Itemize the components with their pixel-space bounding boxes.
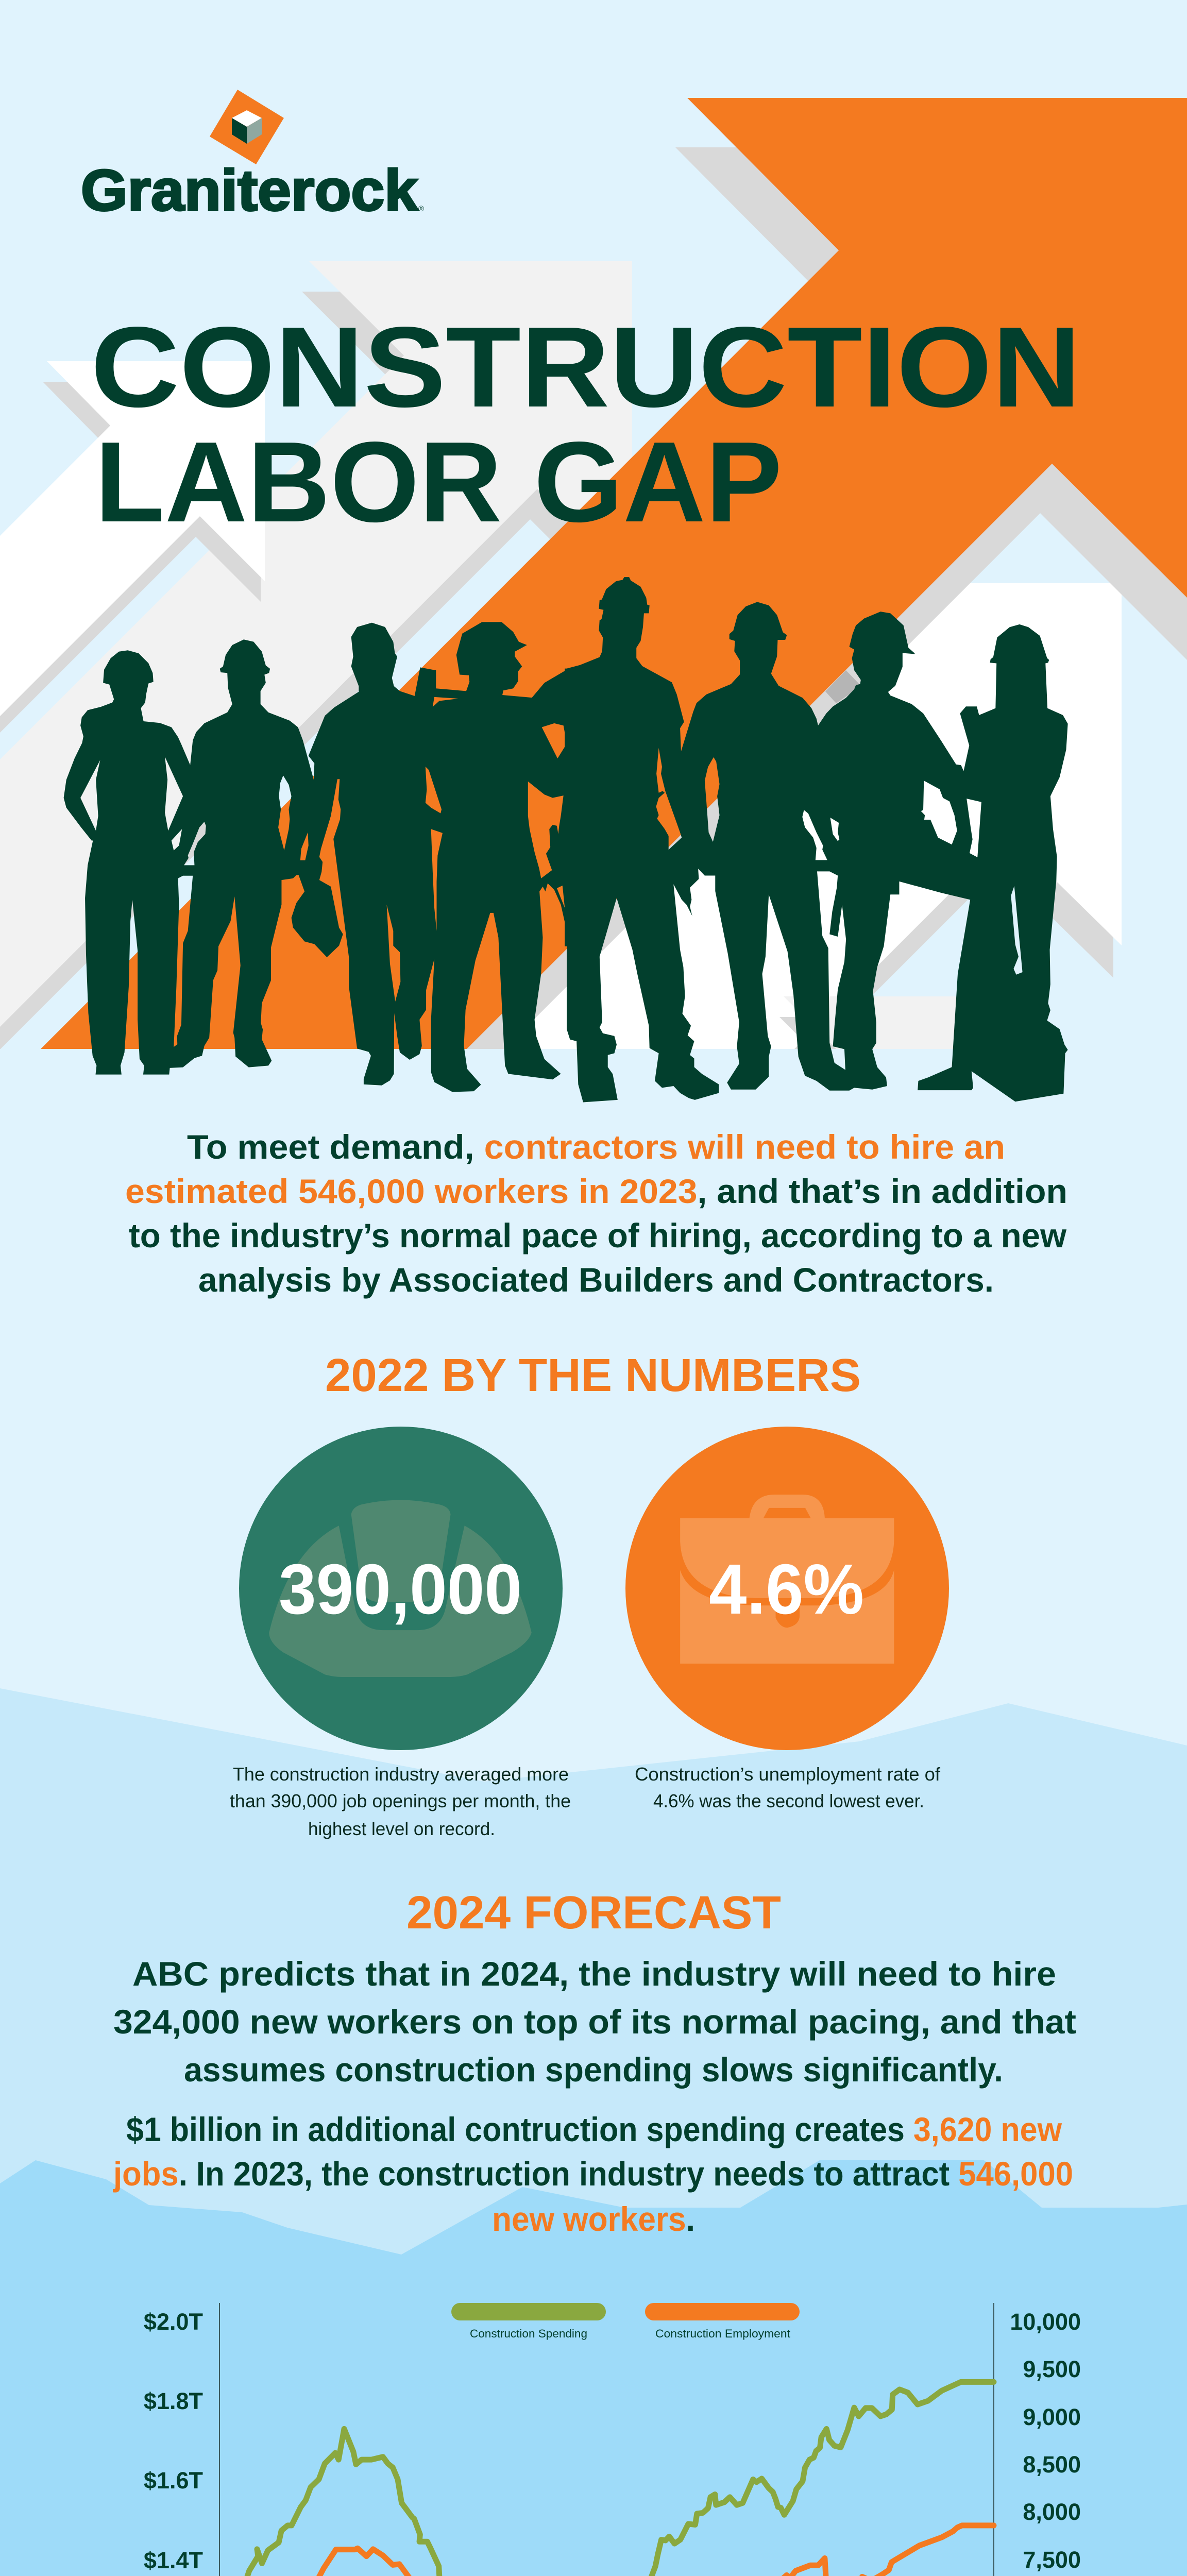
workers right part — [565, 577, 1068, 1103]
line: construction spending — [222, 2382, 994, 2576]
line chart — [144, 2303, 1081, 2576]
title: LABOR GAP — [95, 418, 782, 546]
chart axes — [219, 2303, 994, 2576]
logo: Graniterock — [81, 90, 424, 223]
left axis labels: $1.8T — [144, 2388, 203, 2414]
right axis labels — [1010, 2309, 1081, 2576]
right axis labels: 8,500 — [1023, 2451, 1081, 2478]
spending and jobs paragraph: $1 billion in additional contruction spending creates 3,620 new — [126, 2110, 1062, 2148]
number: 390,000: 390,000 — [279, 1550, 522, 1629]
logo wordmark: Graniterock — [81, 158, 418, 223]
spending and jobs paragraph: new workers. — [492, 2200, 695, 2238]
left axis labels: $1.4T — [144, 2547, 203, 2573]
number: 4.6%: 4.6% — [709, 1550, 864, 1629]
right axis labels: 8,000 — [1023, 2499, 1081, 2525]
left axis labels: $2.0T — [144, 2309, 203, 2335]
icon: hard hat — [269, 1500, 532, 1677]
legend: construction employment: Construction Employment — [655, 2327, 790, 2340]
right axis labels: 9,000 — [1023, 2404, 1081, 2430]
icon: briefcase — [680, 1495, 894, 1664]
left axis labels: $1.6T — [144, 2467, 203, 2494]
registered mark: ® — [418, 205, 424, 213]
background arrow graphic — [0, 98, 1187, 1049]
caption: job openings — [230, 1764, 571, 1839]
intro paragraph: analysis by Associated Builders and Contractors. — [198, 1261, 994, 1299]
forecast paragraph — [113, 1955, 1076, 2089]
icon: logo diamond with cube — [210, 90, 284, 164]
caption: unemployment — [635, 1764, 941, 1811]
heading: 2022 by the numbers: 2022 BY THE NUMBERS — [325, 1350, 861, 1401]
stat: 4.6% unemployment — [625, 1427, 949, 1750]
stat: 390,000 job openings — [239, 1427, 563, 1750]
legend: construction spending — [451, 2303, 606, 2340]
intro paragraph: To meet demand, contractors will need to hire an — [187, 1128, 1005, 1166]
spending and jobs paragraph: jobs. In 2023, the construction industry needs to attract 546,000 — [112, 2155, 1073, 2193]
intro paragraph: to the industry’s normal pace of hiring, according to a new — [129, 1216, 1067, 1255]
legend: construction employment — [645, 2303, 800, 2340]
intro paragraph: estimated 546,000 workers in 2023 , and that’s in addition — [125, 1172, 1067, 1210]
left axis labels — [144, 2309, 203, 2576]
heading: 2024 forecast: 2024 FORECAST — [406, 1887, 781, 1939]
forecast paragraph: 324,000 new workers on top of its normal pacing, and that — [113, 2003, 1076, 2041]
workers left part — [64, 622, 568, 1092]
intro paragraph — [125, 1128, 1067, 1299]
title — [91, 303, 1081, 546]
legend: construction spending: Construction Spending — [470, 2327, 587, 2340]
caption: job openings: The construction industry averaged more — [233, 1764, 569, 1785]
right axis labels: 7,500 — [1023, 2547, 1081, 2573]
title: CONSTRUCTION — [91, 303, 1081, 431]
caption: unemployment: Construction’s unemployment rate of — [635, 1764, 941, 1785]
forecast paragraph: ABC predicts that in 2024, the industry will need to hire — [132, 1955, 1056, 1993]
caption: job openings: highest level on record. — [308, 1818, 495, 1839]
forecast paragraph: assumes construction spending slows significantly. — [184, 2050, 1003, 2089]
caption: unemployment: 4.6% was the second lowest ever. — [653, 1790, 924, 1811]
right axis labels: 9,500 — [1023, 2356, 1081, 2382]
spending and jobs paragraph — [112, 2110, 1073, 2238]
right axis labels: 10,000 — [1010, 2309, 1081, 2335]
caption: job openings: than 390,000 job openings per month, the — [230, 1790, 571, 1811]
workers silhouette group — [64, 577, 1068, 1103]
line: construction employment — [222, 2526, 994, 2576]
